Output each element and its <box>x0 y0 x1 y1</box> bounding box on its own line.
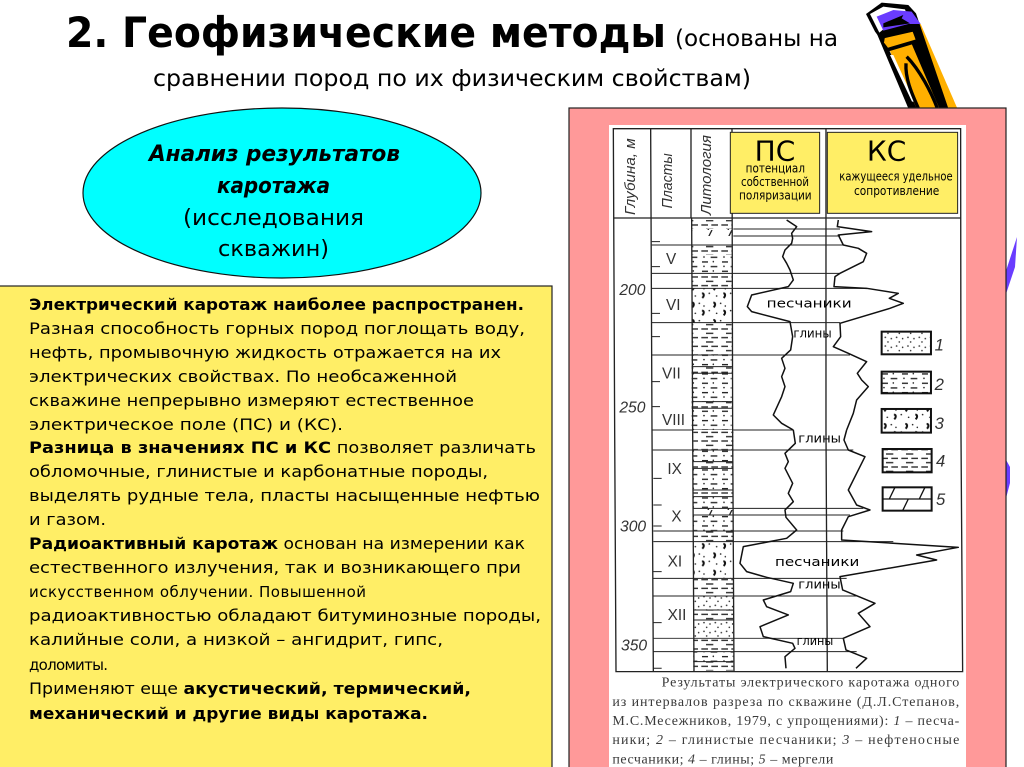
legend 5: marl: 5 <box>936 490 946 509</box>
depth labels upper: 200 <box>618 282 646 299</box>
table grid upper <box>613 129 961 430</box>
caption: М.С.Месежников, 1979, с упрощениями): 1 – песча- <box>612 714 960 729</box>
caption <box>612 676 960 767</box>
layer labels lower: XI <box>668 554 682 571</box>
layer labels lower: IX <box>667 461 682 478</box>
layer labels upper: VII <box>662 365 681 382</box>
panel: pink chart background <box>569 108 1006 767</box>
panel: yellow text block: Радиоактивный каротаж основан на измерении как <box>29 534 525 553</box>
decorative purple shapes: pencil remnants <box>1005 237 1017 502</box>
legend 4: clay <box>883 449 945 472</box>
legend 3: oil sand <box>882 409 945 433</box>
chart: lower well log <box>612 430 963 767</box>
header: KS box <box>827 132 958 213</box>
panel: yellow text block: и газом. <box>29 510 106 529</box>
legend 1: sand: 1 <box>935 336 944 355</box>
layer labels lower: X <box>671 508 682 525</box>
icon: pencil <box>866 3 957 108</box>
panel: yellow text block: электрических свойствах. По необсаженной <box>29 367 457 386</box>
panel: yellow text block: искусственном облучении. Повышенной <box>29 583 366 601</box>
panel: yellow text block: Разница в значениях ПС и КС позволяет различать <box>29 438 536 457</box>
KS curve lower <box>840 430 958 668</box>
legend 4: clay: 4 <box>936 452 945 471</box>
PS curve lower <box>740 430 797 668</box>
legend 2: clayey sand: 2 <box>934 375 945 394</box>
layer labels lower: XII <box>668 607 686 624</box>
lithology column lower <box>693 430 733 671</box>
panel: yellow text block: Применяют еще акустический, термический, <box>29 679 471 698</box>
header: KS box: КС <box>867 135 906 168</box>
header: PS box: собственной <box>741 175 809 189</box>
header: KS box: кажущееся удельное <box>839 170 953 184</box>
panel: yellow text block: калийные соли, а низкой – ангидрит, гипс, <box>29 630 443 649</box>
depth labels upper <box>618 282 646 417</box>
panel: yellow text block: электрическое поле (ПС) и (КС). <box>29 415 343 434</box>
panel: yellow text block: доломиты. <box>29 656 108 674</box>
title: 2. Геофизические методы <box>66 8 666 57</box>
panel: logging analysis ellipse: (исследования <box>183 206 364 231</box>
panel: yellow text block: выделять рудные тела, пласты насыщенные нефтью <box>29 486 540 505</box>
layer labels upper: VI <box>666 297 680 314</box>
panel: yellow text block: нефть, промывочную жидкость отражается на их <box>29 343 501 362</box>
legend 1: sand <box>882 332 944 355</box>
panel: logging analysis ellipse <box>83 108 481 278</box>
caption: Результаты электрического каротажа одного <box>662 676 959 691</box>
chart labels: sands and clays lower: песчаники <box>775 554 859 569</box>
PS curve upper <box>747 220 797 430</box>
panel: yellow text block: радиоактивностью обладают битуминозные породы, <box>29 606 541 625</box>
legend 2: clayey sand <box>882 372 945 394</box>
chart labels: sands and clays lower: глины <box>797 634 833 648</box>
panel: logging analysis ellipse: Анализ результатов <box>147 142 400 167</box>
panel: white chart sheet <box>609 125 966 767</box>
chart labels: sands and clays upper: песчаники <box>767 296 852 310</box>
layer labels upper: VIII <box>662 412 685 429</box>
caption: ники; 2 – глинистые песчаники; 3 – нефтеносные <box>612 733 959 748</box>
header: KS box: сопротивление <box>854 184 939 198</box>
layer labels upper: V <box>666 251 677 268</box>
chart: upper well log <box>613 129 961 433</box>
panel: yellow text block: обломочные, глинистые и карбонатные породы, <box>29 462 488 481</box>
header: PS box: ПС <box>755 135 795 168</box>
header: column titles: Пласты <box>660 153 676 208</box>
lithology column upper <box>692 220 732 430</box>
header: PS box: поляризации <box>739 188 812 202</box>
panel: yellow text block: Электрический каротаж наиболее распространен. <box>29 295 524 314</box>
header: column titles: Глубина, м <box>623 138 639 215</box>
legend 3: oil sand: 3 <box>935 414 945 433</box>
header: column titles: Литология <box>699 135 715 216</box>
panel: logging analysis ellipse: скважин) <box>218 237 329 262</box>
depth labels lower <box>620 518 647 655</box>
header: column titles <box>623 135 715 216</box>
chart labels: sands and clays lower: глины <box>798 432 841 446</box>
depth labels lower: 300 <box>620 518 646 535</box>
title <box>66 8 838 92</box>
panel: logging analysis ellipse: каротажа <box>217 174 330 199</box>
panel: yellow text block <box>0 286 552 767</box>
title: (основаны на <box>675 26 838 52</box>
title: сравнении пород по их физическим свойствам) <box>153 66 751 92</box>
depth labels lower: 350 <box>621 638 647 655</box>
chart labels: sands and clays upper <box>767 296 852 340</box>
chart labels: sands and clays lower: глины <box>798 577 841 591</box>
legend 5: marl <box>883 487 946 511</box>
panel: yellow text block: скважине непрерывно измеряют естественное <box>29 391 474 410</box>
header: PS box <box>730 132 820 213</box>
chart labels: sands and clays upper: глины <box>793 326 832 340</box>
table grid lower <box>615 430 963 672</box>
header: PS box: потенциал <box>746 161 805 175</box>
caption: песчаники; 4 – глины; 5 – мергели <box>612 752 834 767</box>
panel: yellow text block: механический и другие виды каротажа. <box>29 704 428 723</box>
layer labels upper <box>662 251 685 429</box>
panel: yellow text block: естественного излучения, так и возникающего при <box>29 558 521 577</box>
layer labels lower <box>667 461 686 624</box>
panel: yellow text block: Разная способность горных пород поглощать воду, <box>29 319 525 338</box>
chart labels: sands and clays lower <box>775 432 859 648</box>
depth labels upper: 250 <box>618 400 646 417</box>
KS curve upper <box>833 220 903 430</box>
caption: из интервалов разреза по скважине (Д.Л.Степанов, <box>612 695 959 710</box>
